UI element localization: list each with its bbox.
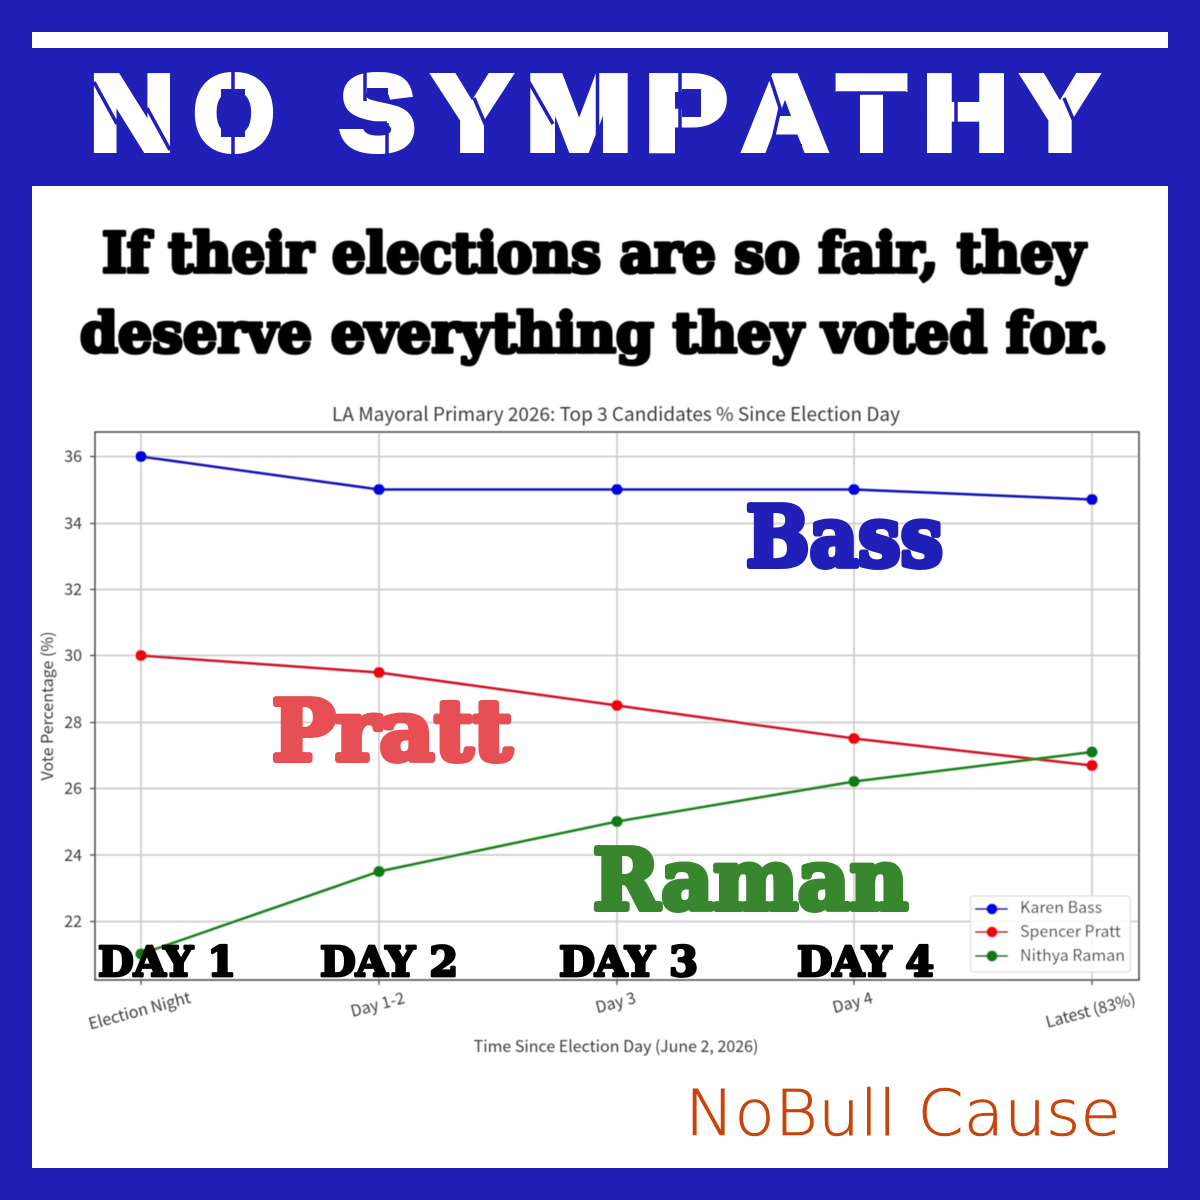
legend	[970, 894, 1130, 972]
x axis labels: Latest (83%)	[1043, 986, 1138, 1033]
day labels: DAY 1	[98, 938, 236, 986]
y axis labels: 30	[64, 642, 82, 666]
x axis labels: Election Night	[85, 984, 193, 1034]
legend: Spencer Pratt	[1020, 918, 1121, 942]
series: Nithya Raman	[136, 746, 1098, 960]
title: A	[743, 54, 827, 172]
x axis title: Time Since Election Day (June 2, 2026)	[474, 1033, 758, 1057]
title: O	[194, 54, 274, 172]
legend: Nithya Raman	[1020, 942, 1125, 966]
day labels	[98, 938, 934, 986]
title: Y	[1023, 54, 1097, 172]
title	[90, 54, 1097, 172]
line chart	[34, 432, 1139, 1057]
title: S	[340, 54, 415, 172]
day labels: DAY 4	[797, 938, 934, 986]
label: Raman: Raman	[593, 831, 908, 929]
title: P	[645, 54, 727, 172]
y axis labels	[64, 443, 82, 932]
y axis labels: 32	[64, 576, 82, 600]
title: N	[90, 54, 174, 172]
x axis labels: Day 3	[592, 984, 638, 1018]
title: T	[838, 54, 905, 172]
y axis labels: 24	[64, 842, 82, 866]
day labels: DAY 3	[559, 938, 698, 986]
title: H	[923, 54, 1008, 172]
series: Karen Bass	[136, 451, 1098, 505]
y axis labels: 22	[64, 908, 82, 932]
headline: If their elections are so fair, they	[102, 220, 1087, 285]
title: Y	[434, 54, 510, 172]
series: Spencer Pratt	[136, 650, 1098, 771]
title: M	[526, 54, 632, 172]
y axis labels: 26	[64, 775, 82, 799]
y axis labels: 34	[64, 510, 82, 534]
panel: white content area	[32, 186, 1168, 1168]
y axis labels: 28	[64, 709, 82, 733]
y axis labels: 36	[64, 443, 82, 467]
label: Pratt: Pratt	[272, 682, 512, 780]
label: Bass: Bass	[746, 488, 943, 586]
headline: deserve everything they voted for.	[80, 300, 1108, 365]
x axis labels: Day 4	[829, 984, 875, 1018]
x axis labels: Day 1-2	[347, 984, 407, 1022]
brand wordmark: NoBull Cause	[685, 1077, 1121, 1150]
headline	[80, 220, 1108, 365]
chart title: LA Mayoral Primary 2026: Top 3 Candidates % Since Election Day	[332, 400, 900, 427]
day labels: DAY 2	[320, 938, 458, 986]
x axis labels	[85, 984, 1138, 1034]
legend: Karen Bass	[1020, 894, 1102, 918]
y axis title: Vote Percentage (%)	[34, 632, 58, 780]
